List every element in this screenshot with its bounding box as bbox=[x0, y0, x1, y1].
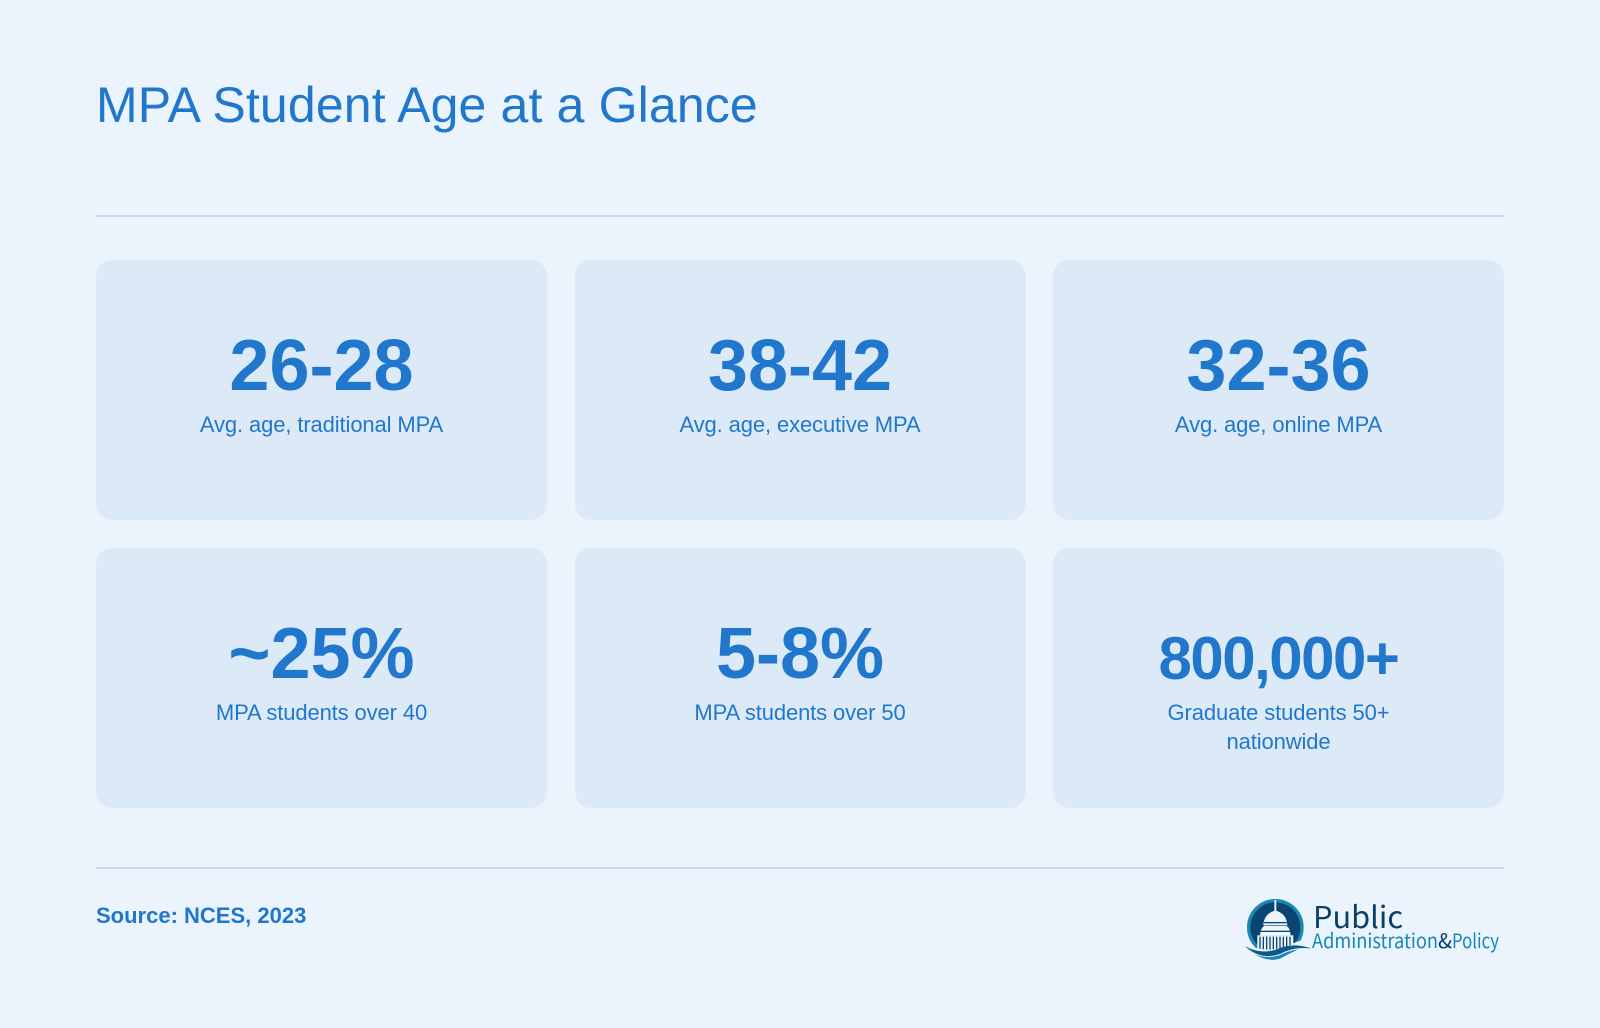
stat: ~25%: ~25% bbox=[228, 614, 415, 694]
label: graduate students: nationwide bbox=[1226, 729, 1330, 754]
panel: students over 50 bbox=[574, 548, 1026, 808]
label: online: Avg. age, online MPA bbox=[1175, 412, 1382, 437]
label: traditional: Avg. age, traditional MPA bbox=[200, 412, 443, 437]
logo wordmark: Policy bbox=[1452, 925, 1499, 954]
logo: Public Administration & Policy bbox=[1245, 893, 1499, 960]
logo wordmark bbox=[1312, 893, 1499, 954]
label: over 50: MPA students over 50 bbox=[694, 700, 906, 725]
stat: 800,000+: 800,000+ bbox=[1159, 625, 1398, 692]
panel: executive MPA age bbox=[574, 260, 1026, 520]
logo wordmark: Administration bbox=[1312, 925, 1438, 954]
icon: capitol dome bbox=[1245, 900, 1312, 962]
stat: 38-42: 38-42 bbox=[708, 326, 892, 406]
stat: 26-28: 26-28 bbox=[229, 326, 414, 406]
panel: traditional MPA age bbox=[96, 260, 547, 520]
panel: online MPA age bbox=[1053, 260, 1504, 520]
panel: students over 40 bbox=[96, 548, 547, 808]
title: MPA Student Age at a Glance bbox=[96, 77, 758, 133]
stat: 32-36: 32-36 bbox=[1186, 326, 1371, 406]
label: graduate students: Graduate students 50+ bbox=[1168, 700, 1389, 725]
logo wordmark: & bbox=[1438, 925, 1452, 954]
logo wordmark: Public bbox=[1313, 893, 1403, 937]
label: executive: Avg. age, executive MPA bbox=[679, 412, 920, 437]
panel: graduate students 50+ bbox=[1053, 548, 1504, 808]
label: over 40: MPA students over 40 bbox=[216, 700, 427, 725]
source: Source: NCES, 2023 bbox=[96, 903, 306, 928]
stat: 5-8%: 5-8% bbox=[716, 614, 884, 694]
label: graduate students bbox=[1168, 700, 1389, 754]
